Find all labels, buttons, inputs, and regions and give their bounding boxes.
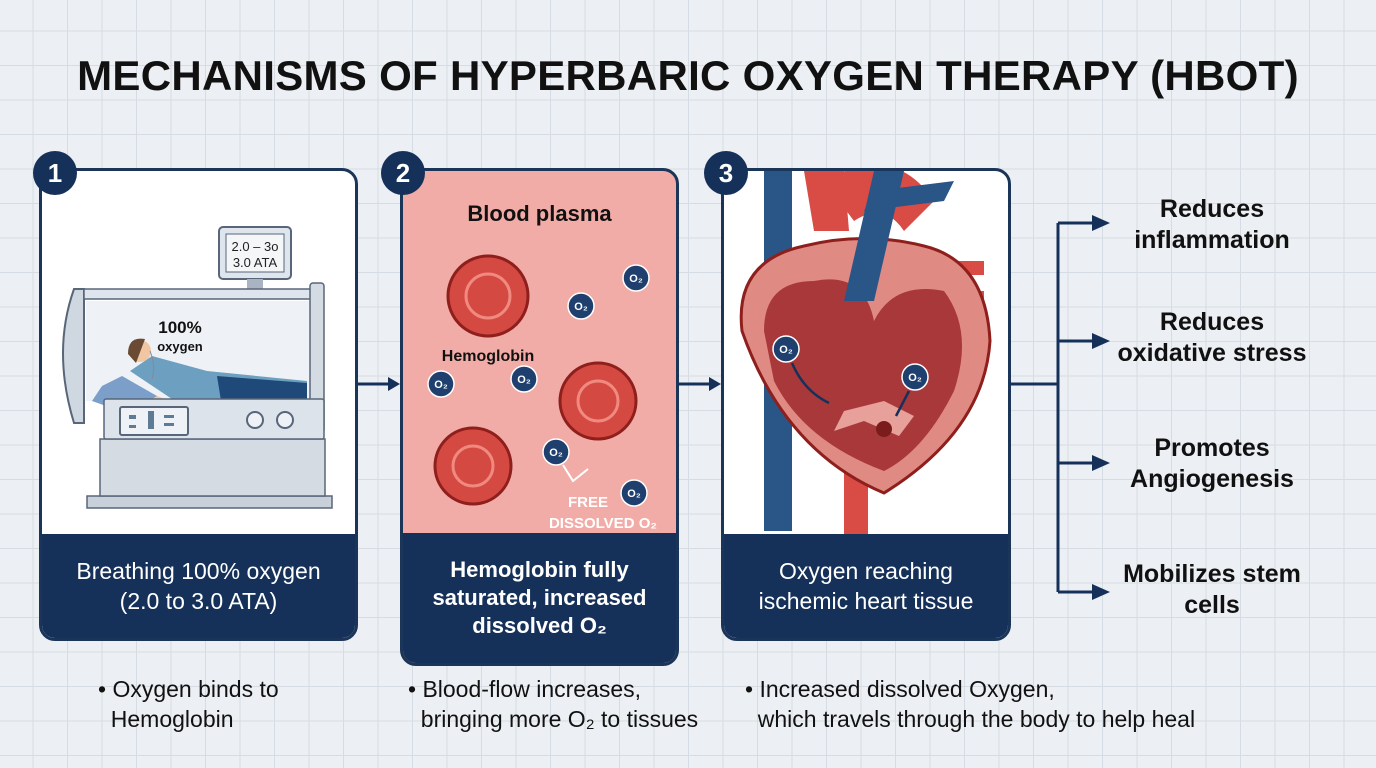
effect: mobilizes stem cells bbox=[1123, 560, 1301, 619]
illustration: hemoglobin and O2 bbox=[427, 254, 657, 532]
heading: blood plasma: Blood plasma bbox=[467, 201, 612, 226]
arrow 2 to 3 bbox=[679, 377, 721, 391]
caption 3: ischemic heart tissue bbox=[759, 588, 973, 614]
illustration: hemoglobin and O2: O₂ bbox=[629, 273, 643, 285]
badge 1: 1 bbox=[48, 158, 62, 188]
caption 1 bbox=[42, 534, 355, 638]
panel 3: heart bbox=[721, 168, 1011, 641]
bullet 2: bringing more O₂ to tissues bbox=[421, 706, 698, 732]
illustration: hyperbaric chamber: 3.0 ATA bbox=[233, 255, 277, 270]
illustration: hyperbaric chamber bbox=[62, 226, 333, 509]
bullet 3: which travels through the body to help heal bbox=[758, 706, 1195, 732]
illustration: hemoglobin and O2: O₂ bbox=[574, 301, 588, 313]
caption 1: (2.0 to 3.0 ATA) bbox=[120, 588, 277, 614]
illustration: heart: O₂ bbox=[779, 344, 793, 356]
caption 2 bbox=[403, 533, 676, 663]
badge 3: 3 bbox=[719, 158, 733, 188]
illustration: hyperbaric chamber: oxygen bbox=[157, 339, 203, 354]
illustration: hemoglobin and O2: FREE bbox=[568, 494, 608, 511]
bullet 3 bbox=[745, 676, 1195, 732]
illustration: hemoglobin and O2: DISSOLVED O₂ bbox=[549, 515, 657, 532]
bullet 3: • Increased dissolved Oxygen, bbox=[745, 676, 1055, 702]
illustration: hemoglobin and O2: O₂ bbox=[549, 447, 563, 459]
arrow 1 to 2 bbox=[358, 377, 400, 391]
effect: promotes angiogenesis: Promotes bbox=[1154, 434, 1270, 462]
badge 3 bbox=[704, 151, 748, 195]
illustration: heart bbox=[740, 171, 992, 534]
illustration: hemoglobin and O2: O₂ bbox=[517, 374, 531, 386]
illustration: hemoglobin and O2: O₂ bbox=[434, 379, 448, 391]
effect: mobilizes stem cells: Mobilizes stem bbox=[1123, 560, 1301, 588]
effect: reduces inflammation: Reduces bbox=[1160, 195, 1264, 223]
effect: promotes angiogenesis: Angiogenesis bbox=[1130, 465, 1294, 493]
bullet 1: Hemoglobin bbox=[111, 706, 234, 732]
effect: reduces inflammation: inflammation bbox=[1134, 226, 1290, 254]
caption 1: Breathing 100% oxygen bbox=[76, 558, 321, 584]
effect: reduces oxidative stress: Reduces bbox=[1160, 308, 1264, 336]
illustration: heart: O₂ bbox=[908, 372, 922, 384]
caption 3: Oxygen reaching bbox=[779, 558, 953, 584]
effect: mobilizes stem cells: cells bbox=[1184, 591, 1240, 619]
badge 2: 2 bbox=[396, 158, 410, 188]
panel 1: chamber bbox=[39, 168, 358, 641]
effect: reduces oxidative stress: oxidative stress bbox=[1118, 339, 1306, 367]
illustration: hyperbaric chamber: 100% bbox=[158, 318, 202, 337]
caption 2: dissolved O₂ bbox=[472, 613, 607, 638]
bullet 1: • Oxygen binds to bbox=[98, 676, 279, 702]
badge 1 bbox=[33, 151, 77, 195]
bullet 2: • Blood-flow increases, bbox=[408, 676, 641, 702]
bullet 1 bbox=[98, 676, 279, 732]
branching arrows bbox=[1011, 215, 1110, 600]
title: MECHANISMS OF HYPERBARIC OXYGEN THERAPY (HBOT) bbox=[77, 52, 1299, 99]
caption 2: saturated, increased bbox=[432, 585, 646, 610]
effect: promotes angiogenesis bbox=[1130, 434, 1294, 493]
illustration: hyperbaric chamber: 2.0 – 3o bbox=[232, 239, 278, 254]
effect: reduces oxidative stress bbox=[1118, 308, 1306, 367]
effect: reduces inflammation bbox=[1134, 195, 1290, 254]
illustration: hemoglobin and O2: O₂ bbox=[627, 488, 641, 500]
illustration: hemoglobin and O2: Hemoglobin bbox=[442, 348, 534, 365]
panel 2: blood plasma bbox=[400, 168, 679, 666]
caption 2: Hemoglobin fully bbox=[450, 557, 629, 582]
bullet 2 bbox=[408, 676, 698, 732]
badge 2 bbox=[381, 151, 425, 195]
caption 3 bbox=[724, 534, 1008, 638]
